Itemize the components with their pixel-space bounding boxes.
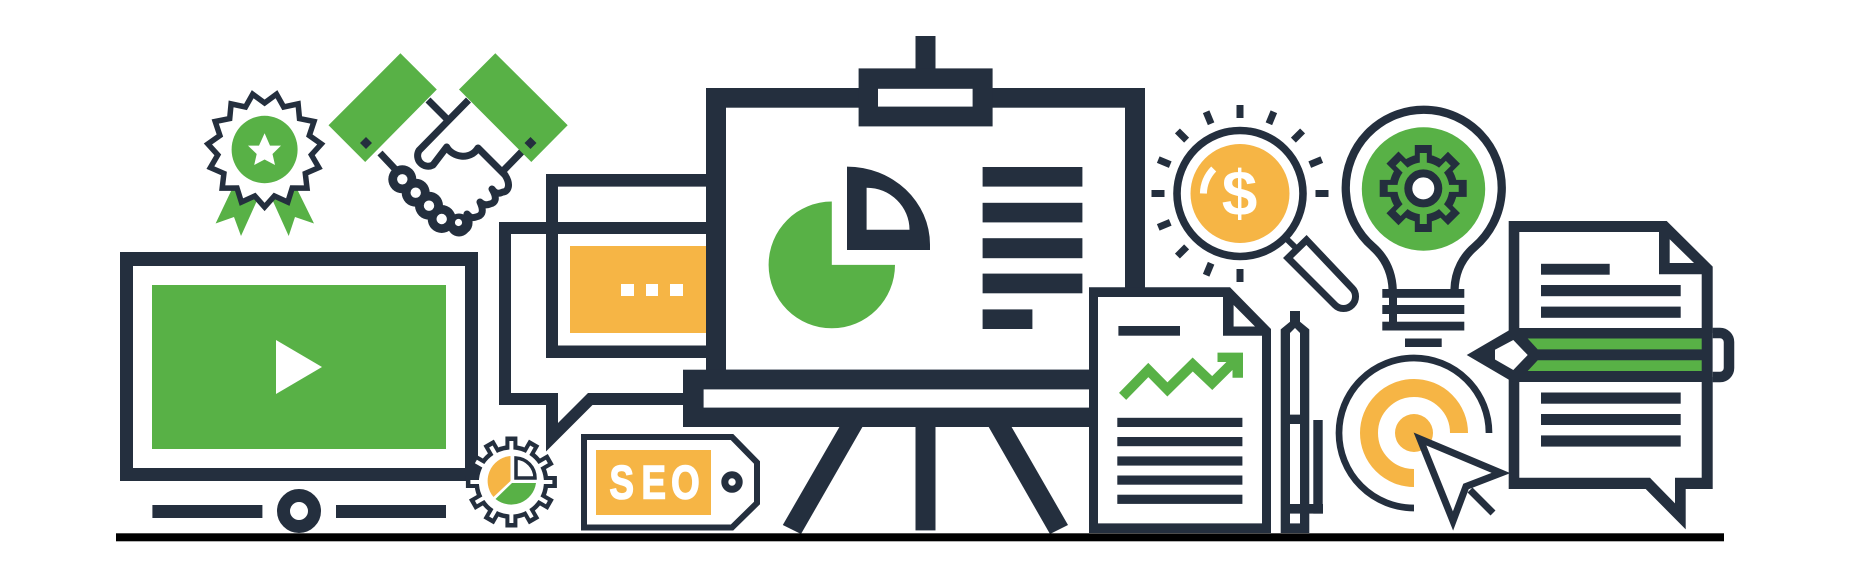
speech bubbles behind the board: [499, 174, 706, 452]
award medal: [208, 94, 321, 236]
report document with growth chart: [1089, 287, 1271, 533]
document with pencil: [1467, 221, 1729, 529]
light bulb with gear: [1346, 110, 1502, 347]
SEO price tag: SEO: [610, 456, 700, 509]
presentation board: [683, 36, 1145, 534]
small gear with pie chart: [466, 436, 557, 528]
pen: [1281, 311, 1323, 533]
target: [1339, 358, 1489, 508]
mouse cursor: [1420, 439, 1501, 521]
handshake: [328, 53, 568, 236]
magnifying glass with dollar coin: [1152, 105, 1356, 309]
ground line: [116, 533, 1724, 541]
magnifying glass with dollar coin: $: [1222, 157, 1257, 229]
monitor with video player: [120, 252, 478, 526]
SEO price tag: [584, 437, 757, 528]
